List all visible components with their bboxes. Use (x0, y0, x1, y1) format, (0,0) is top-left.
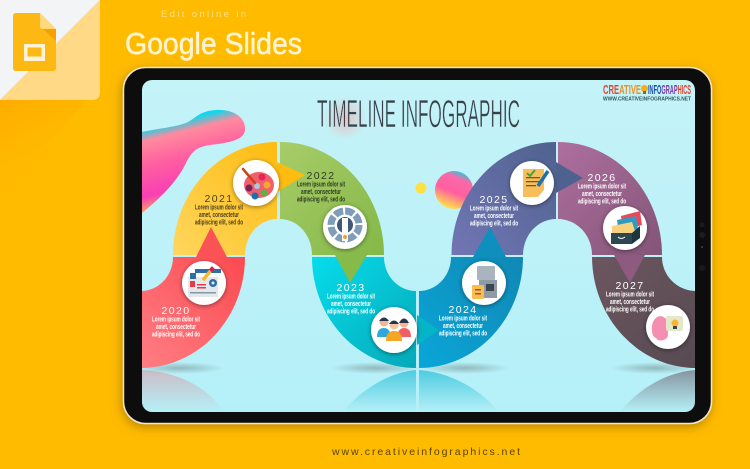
arrow 2025 to 2026 (556, 162, 583, 193)
decorative blob: top left (142, 110, 245, 213)
text 2020: amet, consectetur (156, 322, 196, 331)
text 2020: adipiscing elit, sed do (152, 330, 200, 338)
text 2021: Lorem ipsum dolor sit (195, 202, 243, 212)
icon: brain and idea 2027 (646, 305, 690, 349)
icon: design board 2020 (182, 261, 226, 305)
text 2022: 2022 (307, 170, 335, 182)
text 2026: amet, consectetur (582, 189, 622, 198)
text 2027: 2027 (616, 280, 644, 292)
text 2026: Lorem ipsum dolor sit (578, 182, 626, 190)
arrow 2024 to 2025 (473, 227, 506, 257)
heading: edit online: Edit online in (161, 9, 246, 20)
text 2021: adipiscing elit, sed do (195, 218, 243, 226)
text 2020 (152, 305, 200, 338)
logo: creative infographics: WWW.CREATIVEINFOGRAPHICS.NET (603, 96, 692, 102)
text 2026: adipiscing elit, sed do (578, 196, 626, 206)
text 2023: 2023 (337, 282, 365, 294)
text 2020: 2020 (162, 305, 190, 317)
text 2023 (327, 282, 375, 316)
text 2020: Lorem ipsum dolor sit (152, 314, 200, 324)
icon: team people 2023 (371, 307, 417, 353)
screen (135, 80, 700, 412)
text 2027: Lorem ipsum dolor sit (606, 290, 654, 298)
text 2024: 2024 (449, 304, 477, 316)
text 2022 (297, 170, 345, 204)
heading: Google Slides: Google Slides (125, 26, 302, 61)
segment 2025 (452, 142, 583, 255)
segment 2027 (592, 255, 696, 368)
text 2022: adipiscing elit, sed do (297, 194, 345, 204)
text 2025: 2025 (480, 194, 508, 206)
segment 2020 (141, 227, 245, 368)
decorative ball (435, 171, 473, 209)
icon: paint palette 2021 (233, 160, 279, 206)
icon: slides file (13, 13, 56, 71)
segment 2021 (173, 142, 305, 255)
text 2022: Lorem ipsum dolor sit (297, 180, 345, 188)
text 2023: Lorem ipsum dolor sit (327, 292, 375, 300)
text 2021: amet, consectetur (199, 210, 239, 219)
text 2025: Lorem ipsum dolor sit (470, 204, 518, 212)
text 2024: Lorem ipsum dolor sit (439, 314, 487, 322)
logo: creative infographics (603, 85, 691, 100)
arrow 2026 to 2027 (614, 255, 645, 283)
text 2021: 2021 (205, 193, 233, 205)
decorative dot (416, 182, 426, 194)
text 2027 (606, 280, 654, 314)
icon: checklist and pen 2025 (510, 161, 554, 205)
segment 2022 (280, 142, 384, 283)
segment 2024 (419, 227, 523, 368)
text 2026: 2026 (588, 172, 616, 184)
decorative glow behind title (326, 100, 364, 136)
arrow 2020 to 2021 (196, 227, 227, 257)
arrow 2021 to 2022 (277, 162, 305, 192)
arrow 2022 to 2023 (335, 255, 367, 283)
text 2025: amet, consectetur (474, 211, 514, 220)
text 2023: amet, consectetur (331, 299, 371, 308)
text 2025: adipiscing elit, sed do (470, 218, 518, 228)
text 2024: amet, consectetur (443, 321, 483, 330)
reflections under timeline (142, 363, 695, 408)
corner badge: Google Slides (0, 0, 100, 190)
text 2021 (195, 193, 243, 226)
text 2024: adipiscing elit, sed do (439, 328, 487, 338)
text 2027: amet, consectetur (610, 297, 650, 306)
tablet device (124, 68, 712, 424)
text 2025 (470, 194, 518, 228)
text 2026 (578, 172, 626, 206)
segment 2023 (312, 257, 439, 368)
text 2023: adipiscing elit, sed do (327, 306, 375, 316)
segment 2026 (558, 142, 662, 255)
icon: gear and wrench 2022 (323, 205, 367, 249)
website url: www.creativeinfographics.net (331, 446, 520, 458)
text 2024 (439, 304, 487, 338)
text 2022: amet, consectetur (301, 187, 341, 196)
icon: file drawer 2026 (603, 206, 647, 250)
arrow 2023 to 2024 (417, 315, 439, 345)
logo: creative infographics: CREATIVE (603, 83, 641, 97)
text 2027: adipiscing elit, sed do (606, 304, 654, 314)
icon: clipboard and printer 2024 (462, 261, 506, 305)
logo: creative infographics: INFOGRAPHICS (648, 83, 691, 97)
